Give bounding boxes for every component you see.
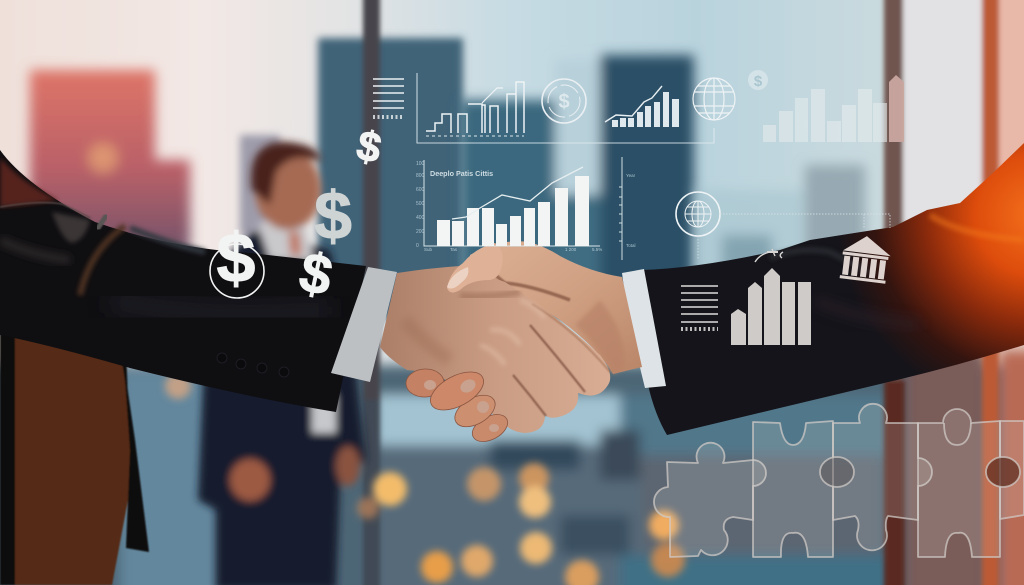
panel: top line chart frame [417,73,714,143]
window frames [363,0,1024,585]
chart: outlined step bars [426,82,524,136]
icon: list lines top [373,79,404,117]
chart: faded large bars [763,89,887,142]
left arm suit sleeve [0,150,366,412]
chart title: Deeplo Patis Cittis [430,169,493,178]
bokeh lights [165,373,685,585]
thumb [447,243,503,293]
notch [944,423,971,445]
icons: dollar signs: $ [294,239,338,308]
puzzle piece 4 [918,409,1000,557]
hole 2 [986,457,1020,487]
axis scale [619,157,636,260]
hole 1 [820,457,854,487]
building: centre blue tower [460,55,694,320]
puzzle pieces [654,404,1024,557]
y axis labels: 100 [416,161,425,167]
chart: sleeve bars [731,268,811,345]
icon: dollar coin outline [542,79,586,123]
chart: main financial bar chart: 5.5% [592,247,602,252]
handshake [380,241,642,447]
person: left foreground brown suit [0,325,149,585]
icon: ring around dollar [210,244,264,298]
icon: dollar coin outline: $ [558,91,570,113]
icon: crossed tools [755,249,783,262]
person: background man [198,142,366,585]
icon: globe top [693,78,735,120]
puzzle piece 5 [1000,421,1024,519]
chart: small bars with trend line [605,86,679,127]
chart: main financial bar chart: Sub [424,247,433,252]
y axis labels: 400 [416,215,425,221]
axis scale: Total [626,243,636,248]
dotted connector [698,214,890,260]
building: left blue tower [240,38,463,318]
y axis labels: 200 [416,229,425,235]
puzzle piece 1 [654,443,766,557]
icons: dollar signs: $ [353,121,385,172]
left hand [380,266,610,433]
y axis labels [416,161,425,249]
left shirt cuff [331,267,397,382]
chart: main financial bar chart: 1 200 [565,247,577,252]
lower city band [0,350,1024,585]
curled fingers [405,364,512,447]
chart: main financial bar chart [416,160,602,252]
icons: dollar signs: $ [217,219,255,297]
icon: faded dollar [748,70,768,90]
y axis labels: 500 [416,201,425,207]
icons: dollar signs: $ [314,178,352,254]
finger shading [513,325,585,416]
right shirt cuff [622,269,666,388]
axis scale: Year [626,173,636,178]
icon: list lines sleeve [681,286,718,329]
distant towers [694,165,865,280]
icon: globe in ring [676,192,720,236]
right hand back [470,241,642,374]
puzzle piece 3 [833,404,932,550]
y axis labels: 800 [416,173,425,179]
y axis labels: 600 [416,187,425,193]
chart: main financial bar chart: Tas [450,247,458,252]
y axis labels: 0 [416,243,419,249]
puzzle piece 2 [753,421,833,557]
icons: dollar signs [217,121,385,308]
icon: bank building [840,233,893,284]
right arm suit sleeve [643,143,1024,435]
faded arrow bar [889,75,904,142]
building: red tower [30,70,190,250]
icon: faded dollar: $ [754,73,763,90]
